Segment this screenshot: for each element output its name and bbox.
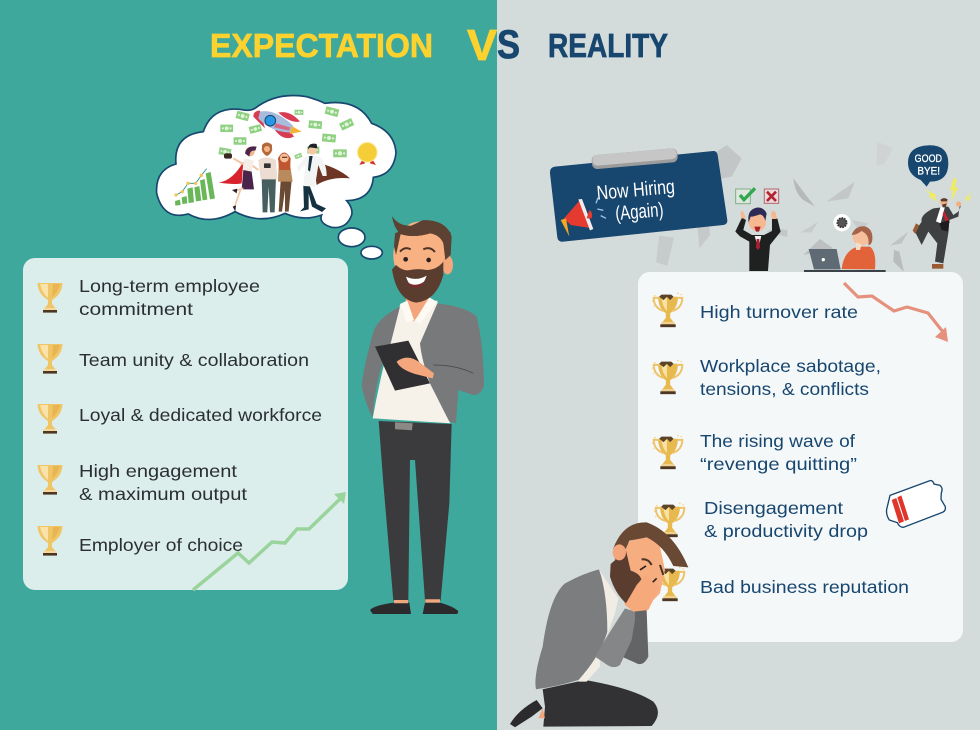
sign text: Now Hiring <box>596 176 676 205</box>
text: revenge quitting <box>700 431 857 474</box>
face <box>615 537 665 610</box>
man: expectation figure <box>362 216 484 614</box>
text: high engagement: & maximum output <box>79 484 247 504</box>
text: workplace sabotage: Workplace sabotage, <box>700 356 881 376</box>
megaphone <box>561 198 606 237</box>
text: revenge quitting: The rising wave of <box>700 431 855 451</box>
red-haired woman <box>278 152 293 212</box>
near arm <box>595 608 635 667</box>
text: bad reputation: Bad business reputation <box>700 577 909 597</box>
text: disengagement: & productivity drop <box>704 521 868 541</box>
person: stressed manager <box>735 188 781 271</box>
back <box>535 569 607 689</box>
title: VS: V <box>467 21 498 70</box>
legs <box>543 680 658 727</box>
icon: trophy 2 <box>38 344 62 374</box>
trousers <box>379 421 452 601</box>
hair <box>613 522 688 567</box>
text: workplace sabotage: tensions, & conflicts <box>700 379 869 399</box>
beard <box>610 551 642 603</box>
person: running away <box>908 145 972 269</box>
title: VS <box>467 21 520 70</box>
text: long-term employee commitment <box>79 276 260 319</box>
tablet <box>375 341 430 391</box>
icon: low battery <box>887 481 945 527</box>
belt <box>395 422 413 430</box>
arrow: rising green trend <box>193 492 346 590</box>
ear <box>613 544 626 560</box>
icon: trophy 5 <box>654 567 684 601</box>
superhero man <box>297 144 350 212</box>
text: disengagement: Disengagement <box>704 498 843 518</box>
shirt <box>373 301 450 423</box>
foot <box>510 700 543 727</box>
icon: trophy 4 <box>654 503 684 537</box>
thought scribble <box>833 214 851 231</box>
text: long-term employee commitment: commitment <box>79 299 193 319</box>
hands <box>625 574 659 612</box>
panel: reality list <box>638 272 963 642</box>
sign: now hiring <box>550 148 727 242</box>
bearded man <box>258 142 277 212</box>
speech bubble <box>908 145 948 187</box>
neck <box>405 293 430 322</box>
text: high engagement: High engagement <box>79 461 237 481</box>
icon: trophy 5 <box>38 526 62 556</box>
title: reality: REALITY <box>548 27 668 64</box>
money <box>218 106 354 159</box>
icon: trophy 3 <box>652 435 682 469</box>
cardigan <box>420 303 484 423</box>
eyes <box>640 566 657 583</box>
bar chart <box>174 169 215 206</box>
text: revenge quitting: “revenge quitting” <box>700 454 857 474</box>
sign text: (Again) <box>614 199 664 225</box>
cross box <box>764 189 779 203</box>
person: worried woman at laptop <box>804 214 886 272</box>
text: employer of choice: Employer of choice <box>79 535 243 555</box>
rocket <box>253 111 302 138</box>
falling papers <box>656 142 908 272</box>
background: expectation side <box>0 0 497 730</box>
arrow: falling trend <box>844 283 948 342</box>
superhero woman <box>219 146 258 212</box>
panel: expectation list <box>23 258 348 590</box>
far arm <box>622 608 648 664</box>
icon: trophy 1 <box>38 283 62 313</box>
text: loyal workforce: Loyal & dedicated workforce <box>79 405 322 425</box>
sign text <box>596 176 678 227</box>
man: reality figure, kneeling <box>510 522 688 727</box>
icon: trophy 3 <box>38 404 62 434</box>
text: disengagement <box>704 498 868 541</box>
thought bubble <box>157 96 396 259</box>
background: reality side <box>497 0 980 730</box>
speech bubble: GOOD <box>915 153 942 165</box>
speech bubble: BYE! <box>917 165 940 177</box>
icon: trophy 1 <box>652 293 682 327</box>
check box <box>736 188 755 204</box>
shoes <box>370 603 458 614</box>
icon: trophy 4 <box>38 465 62 495</box>
shirt under <box>578 568 618 682</box>
text: team unity: Team unity & collaboration <box>79 350 309 370</box>
title: VS: S <box>497 23 520 67</box>
hand <box>397 358 434 378</box>
text: workplace sabotage <box>700 356 881 399</box>
tape <box>591 148 678 169</box>
text: long-term employee commitment: Long-term employee <box>79 276 260 296</box>
medal <box>358 143 377 165</box>
text: high turnover: High turnover rate <box>700 302 858 322</box>
title: expectation: EXPECTATION <box>210 27 433 64</box>
lightning <box>925 177 972 204</box>
icon: trophy 2 <box>652 360 682 394</box>
text: high engagement <box>79 461 247 504</box>
head <box>392 216 453 303</box>
